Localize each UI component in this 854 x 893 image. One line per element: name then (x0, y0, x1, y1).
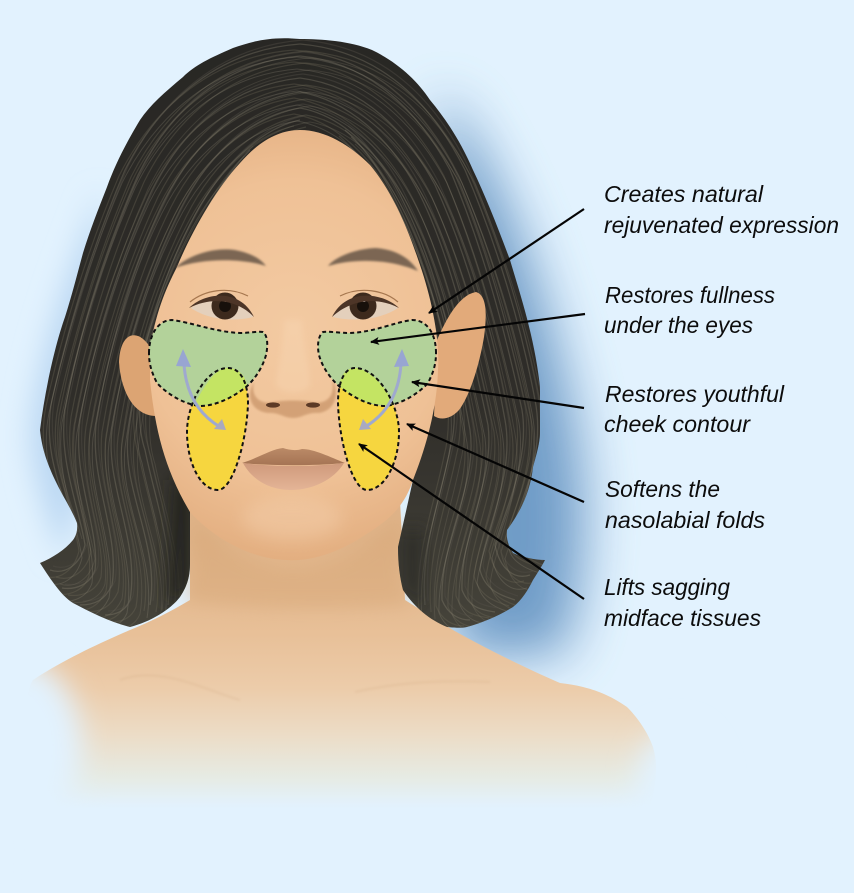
lips (242, 448, 345, 490)
dashed outlines (149, 320, 436, 490)
hair (30, 30, 553, 640)
right eye (332, 290, 399, 320)
neck and shoulders (26, 500, 656, 810)
left green zone: under eye (149, 320, 267, 406)
right overlap zone (340, 368, 394, 405)
leader arrows (359, 209, 585, 599)
right ear (434, 292, 486, 418)
label: expression (604, 181, 839, 238)
left movement arrows (176, 349, 226, 430)
label: fullness: Restores fullness (605, 282, 775, 308)
label: nasolabial folds (605, 476, 765, 533)
label: nasolabial folds: Softens the (605, 476, 720, 502)
right eyebrow (328, 248, 418, 271)
neck shadow (185, 515, 410, 608)
label: expression: rejuvenated expression (604, 212, 839, 238)
label: cheek contour: cheek contour (604, 411, 751, 437)
nose (250, 320, 336, 418)
label: fullness: under the eyes (604, 312, 753, 338)
label: fullness (604, 282, 775, 338)
left yellow zone: nasolabial (187, 368, 248, 490)
right green zone: under eye (318, 320, 436, 406)
label: nasolabial folds: nasolabial folds (605, 507, 765, 533)
label: cheek contour (604, 381, 785, 437)
blue glow behind hair (30, 90, 584, 655)
right movement arrows (359, 349, 409, 430)
label: midface tissues: midface tissues (604, 605, 761, 631)
left eyebrow (175, 249, 266, 268)
label: cheek contour: Restores youthful (605, 381, 785, 407)
right yellow zone: nasolabial (338, 368, 399, 490)
clavicle crease (120, 675, 490, 700)
chin highlight (242, 496, 342, 540)
left ear (119, 335, 156, 416)
label: midface tissues (604, 574, 761, 631)
face (150, 130, 438, 560)
label: expression: Creates natural (604, 181, 764, 207)
label: midface tissues: Lifts sagging (604, 574, 730, 600)
left eye (189, 290, 254, 320)
left overlap zone (194, 368, 247, 405)
shoulder edge fades (0, 657, 854, 893)
